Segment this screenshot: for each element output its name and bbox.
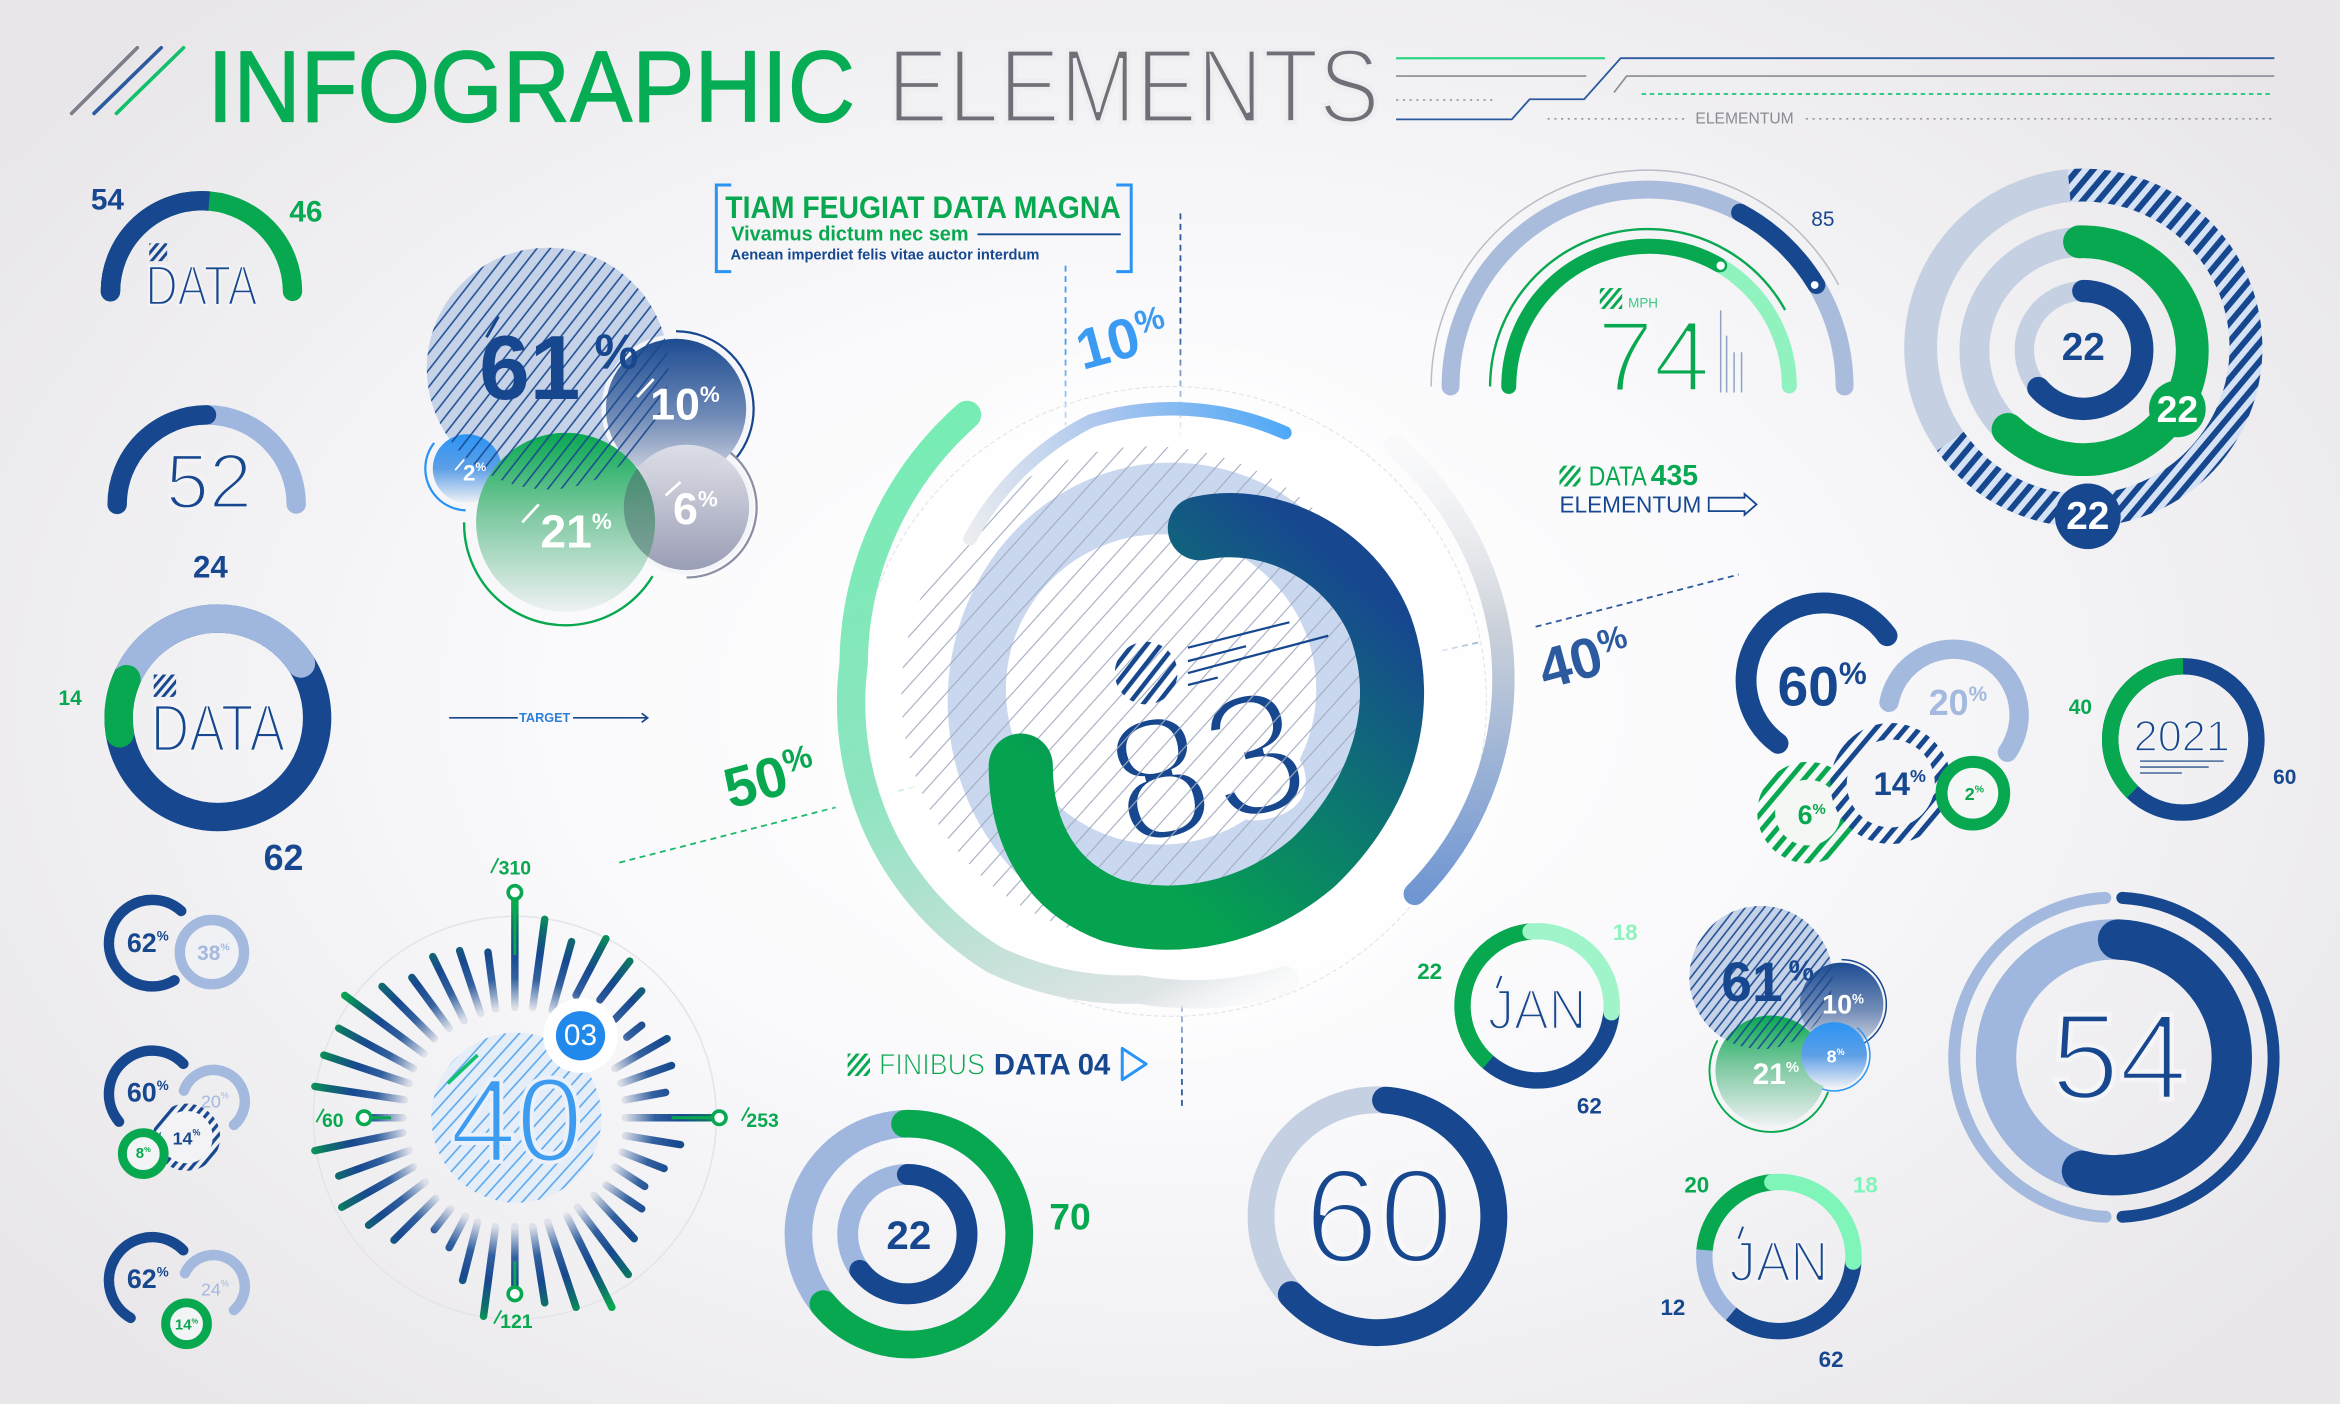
title	[72, 28, 1380, 146]
donut: 60: 60	[1304, 1141, 1454, 1291]
bubble cluster: 61 10 6 21 2: 2	[463, 461, 475, 486]
label: data435 elementum	[1560, 460, 1756, 517]
icon: hatch with lines	[1115, 622, 1328, 704]
percent cluster: 60 20 14 6 2: %	[1975, 784, 1984, 795]
radial dial: 40: 310	[499, 858, 531, 880]
bubble cluster small: 61 10 21 8: 21	[1753, 1058, 1786, 1091]
radial dial: 40: 40	[450, 1054, 583, 1187]
gauge: data 54 46: 54	[91, 183, 124, 216]
bubble cluster: 61 10 6 21 2: %	[475, 460, 486, 474]
bubble cluster: 61 10 6 21 2: %	[698, 486, 718, 511]
donut: jan 22 18 62	[1417, 901, 1642, 1118]
mini gauge: 62 24 14: %	[221, 1278, 229, 1288]
title word: elements: ELEMENTS	[887, 28, 1380, 146]
bubble cluster: 61 10 6 21 2: %	[700, 381, 720, 406]
radial dial: 40: 253	[746, 1110, 779, 1132]
dial bars	[315, 892, 719, 1316]
donut: 2021	[2069, 636, 2296, 843]
percent label: 50: %	[778, 736, 816, 780]
donut: jan 22 18 62: JAN	[1488, 979, 1586, 1042]
donut: 22 70	[795, 1120, 1091, 1348]
concentric rings: 22 22 22: 22	[2062, 326, 2105, 369]
label: finibus data 04	[848, 1048, 1146, 1081]
label: finibus data 04: FINIBUS	[879, 1048, 985, 1081]
bracketed text block	[716, 185, 1131, 272]
donut: 2021: 40	[2069, 696, 2092, 719]
value 83: 83	[1089, 648, 1326, 886]
bubble cluster: 61 10 6 21 2: %	[592, 508, 612, 533]
donut: data 24 14 62	[59, 550, 351, 878]
mini gauge: 62 38	[93, 884, 244, 1003]
mini gauge: 60 20 14 8: 60	[127, 1077, 157, 1107]
percent cluster: 60 20 14 6 2: %	[1910, 766, 1926, 786]
mini gauge: 62 38: %	[220, 942, 230, 953]
radial dial: 40: 03	[564, 1019, 597, 1052]
radial dial: 40: 121	[500, 1311, 533, 1333]
bubble cluster small: 61 10 21 8: %	[1837, 1047, 1845, 1057]
label: elementum: ELEMENTUM	[1695, 110, 1794, 127]
header circuit lines	[1396, 58, 2274, 127]
radial dial: 40: 60	[322, 1110, 344, 1132]
bubble cluster small: 61 10 21 8	[1689, 906, 1886, 1149]
donut: data 24 14 62: 24	[193, 550, 228, 585]
mini gauge: 60 20 14 8: 14	[173, 1129, 193, 1149]
mini gauge: 60 20 14 8: %	[193, 1128, 201, 1138]
mini gauge: 62 24 14: 62	[127, 1264, 157, 1294]
mini gauge: 62 24 14: 24	[201, 1279, 221, 1299]
donut: 2021: 2021	[2134, 713, 2230, 761]
bubble cluster: 61 10 6 21 2: 6	[673, 484, 698, 534]
donut: jan 20 18 12 62: 62	[1819, 1347, 1844, 1372]
target arrow	[449, 711, 648, 725]
main gradient arc	[1021, 525, 1392, 918]
bubble cluster small: 61 10 21 8: 10	[1822, 989, 1852, 1019]
outer mint arc	[851, 415, 1285, 994]
bubble cluster small: 61 10 21 8: %	[1852, 991, 1864, 1006]
mini gauge: 60 20 14 8: %	[221, 1090, 229, 1100]
bubble cluster small: 61 10 21 8: 8	[1827, 1047, 1837, 1067]
donut: 60	[1253, 1092, 1502, 1341]
mini gauge: 60 20 14 8	[91, 1033, 254, 1174]
radial dial: 40	[313, 858, 779, 1333]
percent cluster: 60 20 14 6 2: %	[1969, 682, 1988, 705]
percent cluster: 60 20 14 6 2: 20	[1929, 683, 1969, 723]
mini gauge: 62 38: 38	[197, 942, 220, 965]
label: data435 elementum: 435	[1651, 460, 1698, 492]
gauge: 52	[117, 415, 296, 594]
mini gauge: 62 38: 62	[127, 928, 157, 958]
bracketed text block: Vivamus dictum nec sem	[731, 223, 969, 245]
mini gauge: 62 24 14: 14	[175, 1317, 192, 1334]
percent cluster: 60 20 14 6 2: %	[1839, 656, 1867, 691]
donut: data 24 14 62: DATA	[151, 691, 285, 766]
percent label: 40: %	[1593, 617, 1631, 660]
icon: title slashes	[72, 48, 184, 113]
bubble cluster: 61 10 6 21 2: 61	[479, 318, 580, 419]
concentric rings: 22 22 22: 22	[2157, 388, 2198, 430]
donut: 22 70: 70	[1049, 1195, 1091, 1237]
percent cluster: 60 20 14 6 2: %	[1813, 800, 1826, 817]
percent cluster: 60 20 14 6 2: 6	[1798, 800, 1813, 830]
percent label: 50: 50	[717, 744, 795, 821]
speedometer: 74 mph: 74	[1597, 300, 1710, 414]
top blue arc	[970, 409, 1285, 539]
donut: 22 70: 22	[886, 1213, 931, 1258]
bubble cluster: 61 10 6 21 2: %	[594, 325, 638, 380]
bubble cluster: 61 10 6 21 2	[424, 248, 758, 626]
bracketed text block: Aenean imperdiet felis vitae auctor interdum	[731, 247, 1039, 264]
bracketed text block: TIAM FEUGIAT DATA MAGNA	[725, 190, 1121, 225]
percent label: 40: 40	[1532, 625, 1609, 702]
donut: jan 22 18 62: 62	[1577, 1093, 1602, 1118]
percent cluster: 60 20 14 6 2	[1715, 572, 2030, 854]
mini gauge: 62 38: %	[157, 928, 169, 943]
donut: jan 20 18 12 62: 18	[1853, 1172, 1878, 1197]
donut: jan 20 18 12 62: 20	[1684, 1172, 1709, 1197]
title word: infographic: INFOGRAPHIC	[207, 30, 855, 144]
target arrow: TARGET	[519, 711, 571, 725]
speedometer: 74 mph: 85	[1811, 208, 1835, 231]
donut: data 24 14 62: 62	[264, 838, 303, 878]
label: data435 elementum: DATA	[1589, 461, 1647, 492]
gauge: data 54 46: 46	[289, 195, 323, 228]
gauge: data 54 46	[91, 183, 323, 383]
speedometer: 74 mph: MPH	[1628, 295, 1658, 310]
label: finibus data 04: DATA 04	[994, 1048, 1111, 1081]
donut: jan 20 18 12 62: 12	[1660, 1295, 1685, 1320]
donut: 54: 54	[2051, 988, 2187, 1125]
bubble cluster small: 61 10 21 8: %	[1789, 956, 1814, 988]
mini gauge: 60 20 14 8: %	[157, 1077, 169, 1092]
donut: jan 22 18 62: 22	[1417, 959, 1442, 984]
mini gauge: 60 20 14 8: 20	[201, 1091, 221, 1111]
percent label: 10: %	[1130, 297, 1168, 341]
label: data435 elementum: ELEMENTUM	[1560, 491, 1701, 517]
gauge: data 54 46: DATA	[146, 255, 258, 318]
donut: 2021: 60	[2273, 766, 2296, 789]
concentric rings: 22 22 22	[1907, 171, 2260, 549]
mini gauge: 62 24 14: %	[192, 1316, 199, 1325]
mini gauge: 62 24 14	[93, 1221, 255, 1345]
mini gauge: 60 20 14 8: 8	[136, 1145, 144, 1162]
mini gauge: 60 20 14 8: %	[144, 1145, 151, 1154]
percent cluster: 60 20 14 6 2: 14	[1874, 765, 1910, 802]
central guide lines	[619, 213, 1739, 1110]
mini gauge: 62 24 14: %	[157, 1264, 169, 1279]
concentric rings: 22 22 22: 22	[2066, 495, 2109, 538]
gauge: 52: 52	[166, 439, 252, 525]
bubble cluster small: 61 10 21 8: %	[1786, 1059, 1799, 1076]
percent label: 10: 10	[1070, 305, 1147, 383]
percent cluster: 60 20 14 6 2: 60	[1778, 655, 1839, 717]
right grey arc	[1395, 446, 1503, 894]
central chart: 83	[798, 328, 1545, 1074]
speedometer: 74 mph	[1381, 120, 1914, 653]
bubble cluster: 61 10 6 21 2: 21	[540, 505, 592, 557]
bubble cluster: 61 10 6 21 2: 10	[650, 379, 700, 429]
donut: jan 20 18 12 62: JAN	[1730, 1231, 1828, 1294]
donut: jan 20 18 12 62	[1660, 1151, 1884, 1372]
donut: jan 22 18 62: 18	[1613, 920, 1638, 945]
donut: 54	[1946, 890, 2282, 1225]
percent cluster: 60 20 14 6 2: 2	[1965, 784, 1975, 804]
bubble cluster small: 61 10 21 8: 61	[1721, 951, 1783, 1013]
donut: data 24 14 62: 14	[59, 687, 82, 710]
